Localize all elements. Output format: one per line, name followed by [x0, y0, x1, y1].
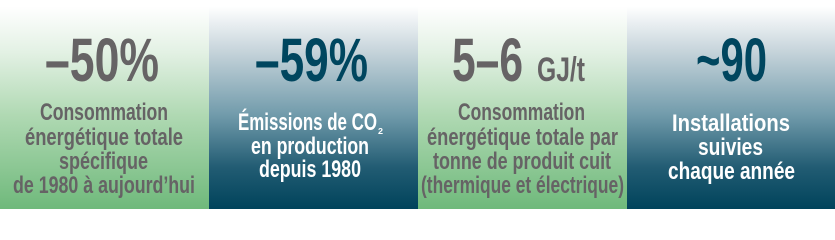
description: installations monitored yearly: chaque année [668, 158, 795, 185]
description: CO2 emissions: en production [251, 133, 369, 160]
panel: CO2 reduction [209, 0, 418, 209]
description: CO2 emissions [238, 108, 384, 183]
panel: energy per tonne [418, 0, 627, 209]
panel: monitored installations [627, 0, 835, 209]
description: installations monitored yearly [668, 110, 795, 185]
stat: 5-6 GJ/t: 5–6 [452, 26, 523, 94]
panel: total energy reduction [0, 0, 209, 209]
description: energy per tonne of product: (thermique et électrique) [421, 172, 624, 199]
stat: ~90: ~90 [696, 26, 767, 94]
description: specific energy consumption: énergétique totale [25, 124, 183, 151]
description: energy per tonne of product: Consommation [458, 99, 585, 126]
description: CO2 emissions: Émissions de CO [238, 108, 377, 136]
stat: -50%: –50% [45, 26, 159, 94]
description: specific energy consumption: spécifique [59, 148, 148, 175]
stat: 5-6 GJ/t: GJ/t [537, 51, 585, 89]
description: energy per tonne of product: tonne de produit cuit [433, 148, 611, 175]
description: energy per tonne of product [421, 99, 624, 199]
description: CO2 emissions: depuis 1980 [259, 156, 361, 183]
description: specific energy consumption: Consommation [40, 99, 168, 126]
stat: -59%: –59% [255, 26, 368, 94]
description: CO2 emissions: 2 [378, 127, 384, 136]
description: installations monitored yearly: Installations [672, 110, 790, 137]
description: specific energy consumption: de 1980 à aujourd’hui [13, 172, 195, 199]
description: specific energy consumption [13, 99, 195, 199]
description: energy per tonne of product: énergétique totale par [427, 124, 618, 151]
description: installations monitored yearly: suivies [698, 134, 763, 161]
